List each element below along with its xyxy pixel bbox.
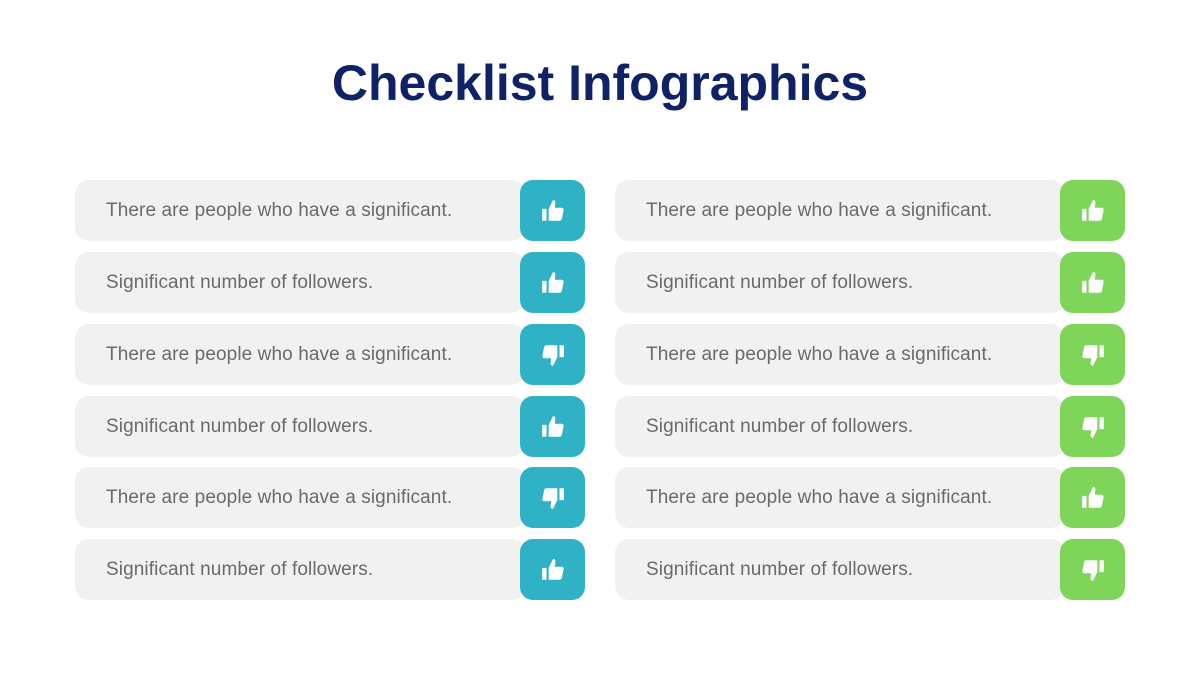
row 1 left [75,180,585,241]
row 4 left: Significant number of followers. [106,416,373,437]
row 2 right: Significant number of followers. [646,272,913,293]
row 5 left [75,467,585,528]
title: Checklist Infographics [332,55,868,111]
row 4 right: Significant number of followers. [646,416,913,437]
row 3 left: There are people who have a significant. [106,344,452,365]
row 2 left: Significant number of followers. [106,272,373,293]
row 1 right [615,180,1125,241]
row 3 right: There are people who have a significant. [646,344,992,365]
row 3 left [75,324,585,385]
row 1 left: There are people who have a significant. [106,200,452,221]
panel: left column [75,180,585,600]
row 5 left: There are people who have a significant. [106,487,452,508]
row 6 right [615,539,1125,600]
panel: right column [615,180,1125,600]
row 3 right [615,324,1125,385]
row 6 right: Significant number of followers. [646,559,913,580]
row 6 left: Significant number of followers. [106,559,373,580]
row 2 left [75,252,585,313]
row 2 right [615,252,1125,313]
row 5 right [615,467,1125,528]
row 1 right: There are people who have a significant. [646,200,992,221]
row 4 left [75,396,585,457]
row 4 right [615,396,1125,457]
row 5 right: There are people who have a significant. [646,487,992,508]
row 6 left [75,539,585,600]
